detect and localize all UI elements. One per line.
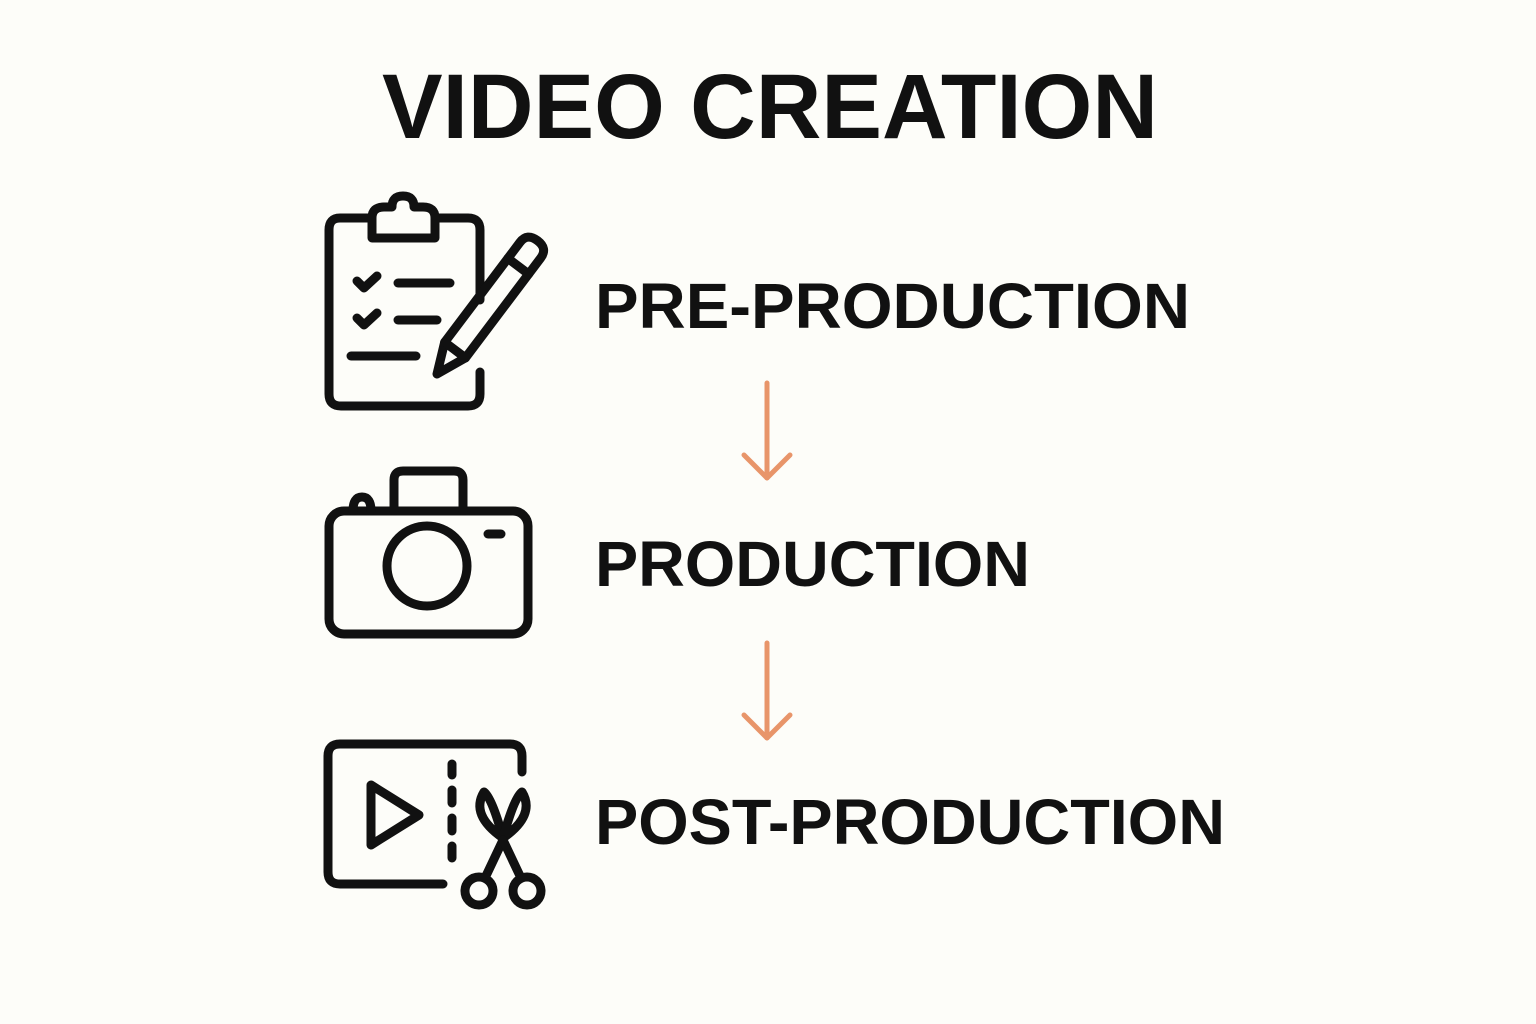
icon: video edit scissors bbox=[328, 744, 541, 905]
arrow 2 bbox=[744, 643, 790, 738]
label: post-production: POST-PRODUCTION bbox=[595, 786, 1225, 858]
icon: clipboard with pencil bbox=[329, 196, 548, 406]
label: production: PRODUCTION bbox=[595, 528, 1030, 600]
icon: camera bbox=[329, 471, 528, 634]
label: pre-production: PRE-PRODUCTION bbox=[595, 270, 1190, 342]
title: VIDEO CREATION bbox=[382, 56, 1158, 158]
arrow 1 bbox=[744, 383, 790, 478]
